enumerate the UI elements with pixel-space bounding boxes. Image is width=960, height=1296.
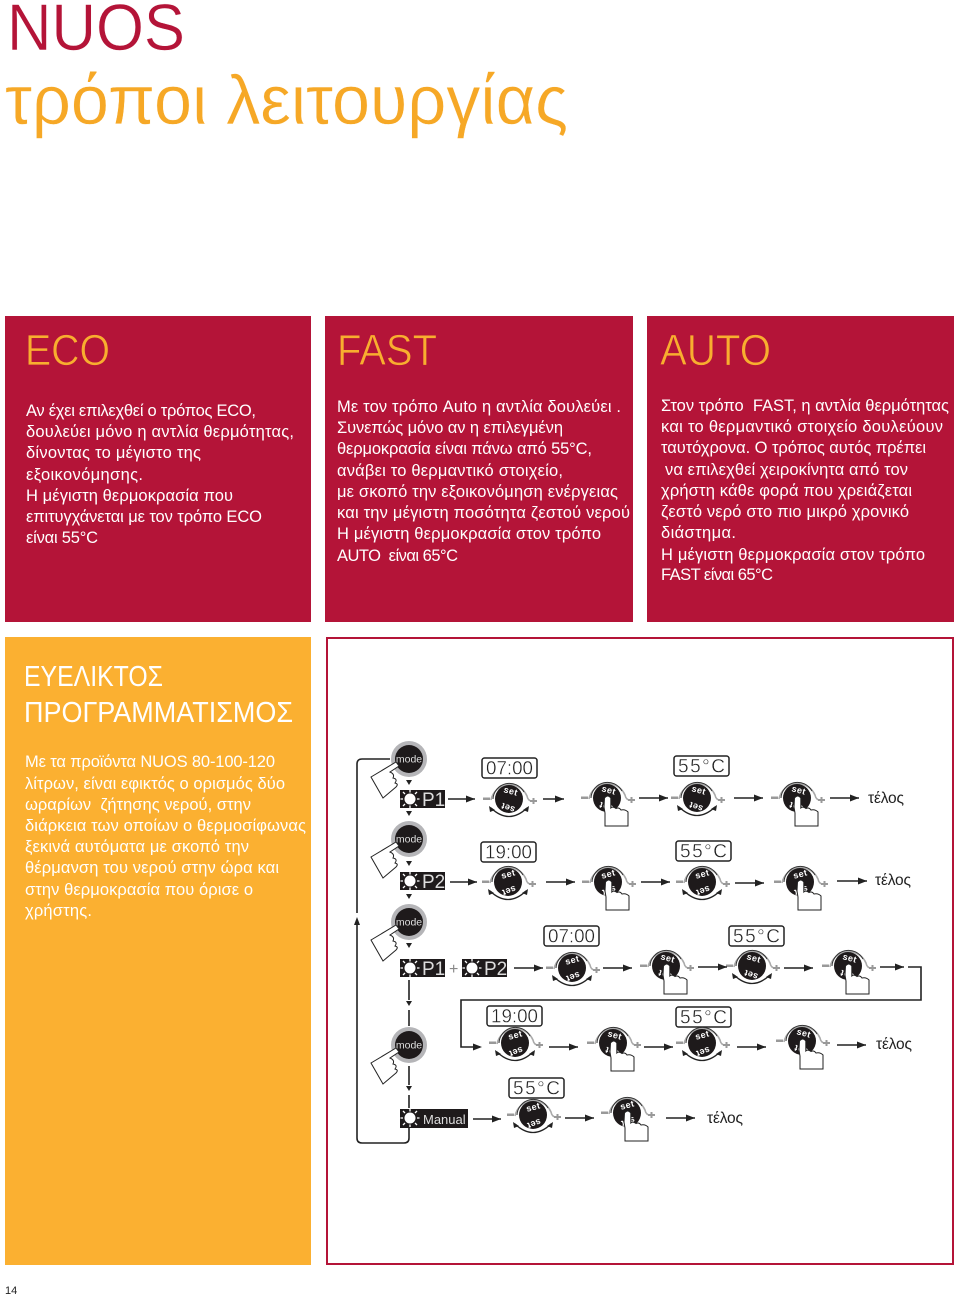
digital displays: 55°C bbox=[678, 756, 725, 778]
text block: FAST description: AUTO είναι 65°C bbox=[337, 547, 458, 565]
text block: FAST description bbox=[337, 398, 630, 565]
text block: AUTO description: FAST είναι 65°C bbox=[661, 566, 773, 584]
text block: FAST description: και την μέγιστη ποσότητα ζεστού νερού bbox=[337, 504, 630, 522]
digital displays: 55°C bbox=[680, 1008, 727, 1028]
dials row 5: set bbox=[526, 1117, 542, 1131]
dials row 4: set bbox=[694, 1028, 710, 1042]
dials row 3: set bbox=[565, 970, 581, 984]
panel: FAST bbox=[325, 316, 633, 622]
heading: flexible programming: ΠΡΟΓΡΑΜΜΑΤΙΣΜΟΣ bbox=[24, 697, 293, 729]
text block: ECO description: Η μέγιστη θερμοκρασία που bbox=[26, 487, 233, 505]
text block: ECO description bbox=[26, 402, 294, 547]
text block: programming description: ωραρίων ζήτησης νερού, στην bbox=[25, 796, 251, 814]
dials row 4 bbox=[489, 1025, 830, 1071]
dials row 1 bbox=[483, 782, 825, 826]
text block: FAST description: με σκοπό την εξοικονόμηση ενέργειας bbox=[337, 483, 618, 501]
end labels: τέλος bbox=[876, 1036, 912, 1053]
dials row 1: set bbox=[500, 801, 516, 815]
mode buttons and connectors: mode bbox=[396, 1040, 422, 1052]
title: τρόποι λειτουργίας bbox=[5, 61, 568, 139]
dials row 1: set bbox=[791, 783, 807, 797]
dials row 2: set bbox=[600, 867, 616, 881]
dials row 4: set bbox=[607, 1028, 623, 1042]
dials row 3: set bbox=[657, 968, 673, 982]
mode labels: P1 bbox=[422, 790, 445, 811]
panel: flexible programming bbox=[5, 637, 311, 1265]
dials row 2: set bbox=[695, 884, 711, 898]
heading: FAST: FAST bbox=[337, 326, 437, 375]
digital displays: 07:00 bbox=[548, 926, 595, 948]
dials row 4: set bbox=[508, 1045, 524, 1059]
mode labels: P2 bbox=[422, 872, 445, 893]
dials row 3: set bbox=[743, 968, 759, 982]
text block: AUTO description: ταυτόχρονα. Ο τρόπος αυτός πρέπει bbox=[661, 439, 926, 457]
digital displays: 07:00 bbox=[486, 758, 533, 780]
text block: AUTO description: χρήστη κάθε φορά που χρειάζεται bbox=[661, 482, 912, 500]
panel: AUTO bbox=[647, 316, 954, 622]
dials row 1: set bbox=[601, 783, 617, 797]
end labels: τέλος bbox=[707, 1110, 743, 1127]
mode buttons and connectors: mode bbox=[396, 834, 422, 846]
text block: ECO description: είναι 55°C bbox=[26, 529, 98, 547]
dials row 5: set bbox=[620, 1115, 636, 1129]
text block: FAST description: Η μέγιστη θερμοκρασία στον τρόπο bbox=[337, 525, 601, 543]
digital displays bbox=[481, 756, 784, 1100]
digital displays: 55°C bbox=[513, 1078, 560, 1100]
dials row 5: set bbox=[619, 1098, 635, 1112]
panel: ECO bbox=[5, 316, 311, 622]
text block: programming description: χρήστης. bbox=[25, 902, 92, 920]
text block: FAST description: ανάβει το θερμαντικό στοιχείο, bbox=[337, 462, 563, 480]
digital displays: 55°C bbox=[680, 842, 727, 862]
dials row 4: set bbox=[507, 1028, 523, 1042]
dials row 3: set bbox=[839, 968, 855, 982]
end labels: τέλος bbox=[875, 872, 911, 889]
end labels: τέλος bbox=[868, 790, 904, 807]
loop arrow: return to start bbox=[354, 759, 409, 1143]
dials row 3: set bbox=[660, 951, 676, 965]
mode labels: P2 bbox=[484, 959, 507, 980]
text block: ECO description: δουλεύει μόνο η αντλία θερμότητας, bbox=[26, 423, 294, 441]
dials row 1: set bbox=[688, 800, 704, 814]
mode buttons and connectors: mode bbox=[396, 916, 422, 928]
dials row 2: set bbox=[694, 867, 710, 881]
digital displays: 19:00 bbox=[491, 1006, 538, 1028]
text block: FAST description: Με τον τρόπο Auto η αντλία δουλεύει . bbox=[337, 398, 621, 416]
text block: ECO description: Αν έχει επιλεχθεί ο τρόπος ECO, bbox=[26, 402, 256, 420]
dials row 2 bbox=[482, 866, 828, 910]
dials row 4: set bbox=[796, 1026, 812, 1040]
text block: ECO description: επιτυγχάνεται με τον τρόπο ECO bbox=[26, 508, 262, 526]
text block: AUTO description: ζεστό νερό στο πιο μικρό χρονικό bbox=[661, 503, 909, 521]
mode buttons and connectors: mode bbox=[396, 754, 422, 766]
text block: ECO description: δίνοντας το μέγιστο της bbox=[26, 444, 201, 462]
dials row 3: set bbox=[842, 951, 858, 965]
text block: programming description bbox=[25, 753, 306, 920]
dials row 1: set bbox=[503, 784, 519, 798]
mode buttons and connectors bbox=[371, 741, 427, 1108]
text block: programming description: Με τα προϊόντα NUOS 80-100-120 bbox=[25, 753, 275, 771]
text block: AUTO description: Η μέγιστη θερμοκρασία στον τρόπο bbox=[661, 546, 925, 564]
dials row 2: set bbox=[500, 867, 516, 881]
heading: AUTO: AUTO bbox=[660, 326, 771, 375]
dials row 2: set bbox=[793, 884, 809, 898]
flow arrows bbox=[448, 798, 921, 1119]
mode labels: P1 bbox=[422, 959, 445, 980]
panel: programming diagram bbox=[327, 638, 953, 1264]
mode labels bbox=[400, 790, 507, 1128]
dials row 3 bbox=[546, 950, 876, 994]
text block: ECO description: εξοικονόμησης. bbox=[26, 466, 143, 484]
dials row 1: set bbox=[598, 800, 614, 814]
dials row 1: set bbox=[788, 800, 804, 814]
text block: FAST description: Συνεπώς μόνο αν η επιλεγμένη bbox=[337, 419, 563, 437]
text block: AUTO description: να επιλεχθεί χειροκίνητα από τον bbox=[665, 461, 908, 479]
digital displays: 55°C bbox=[733, 926, 780, 948]
dials row 5 bbox=[507, 1097, 655, 1141]
text block: programming description: διάρκεια των οποίων ο θερμοσίφωνας bbox=[25, 817, 306, 835]
text block: programming description: στην θερμοκρασία που όρισε ο bbox=[25, 881, 253, 899]
text block: programming description: λίτρων, είναι εφικτός ο ορισμός δύο bbox=[25, 775, 285, 793]
title bbox=[5, 0, 568, 139]
dials row 2: set bbox=[501, 884, 517, 898]
text block: AUTO description: διάστημα. bbox=[661, 524, 736, 542]
text block: AUTO description: και το θερμαντικό στοιχείο δουλεύουν bbox=[661, 418, 943, 436]
mode labels: + bbox=[449, 961, 458, 978]
heading: ECO: ECO bbox=[25, 326, 110, 375]
text block: programming description: ξεκινά αυτόματα με σκοπό την bbox=[25, 838, 249, 856]
heading: flexible programming bbox=[24, 661, 293, 729]
text block: FAST description: θερμοκρασία είναι πάνω από 55°C, bbox=[337, 440, 592, 458]
dials row 2: set bbox=[601, 884, 617, 898]
heading: flexible programming: ΕΥΕΛΙΚΤΟΣ bbox=[24, 661, 163, 693]
dials row 4: set bbox=[793, 1043, 809, 1057]
mode labels: Manual bbox=[423, 1112, 466, 1127]
dials row 3: set bbox=[746, 951, 762, 965]
end labels bbox=[707, 790, 912, 1127]
dials row 2: set bbox=[792, 867, 808, 881]
text block: AUTO description: Στον τρόπο FAST, η αντλία θερμότητας bbox=[661, 397, 949, 415]
dials row 5: set bbox=[525, 1100, 541, 1114]
dials row 4: set bbox=[604, 1045, 620, 1059]
dials row 4: set bbox=[695, 1045, 711, 1059]
digital displays: 19:00 bbox=[485, 842, 532, 864]
dials row 3: set bbox=[564, 953, 580, 967]
dials row 1: set bbox=[691, 783, 707, 797]
text block: AUTO description bbox=[661, 397, 949, 584]
text block: programming description: θέρμανση του νερού στην ώρα και bbox=[25, 859, 279, 877]
